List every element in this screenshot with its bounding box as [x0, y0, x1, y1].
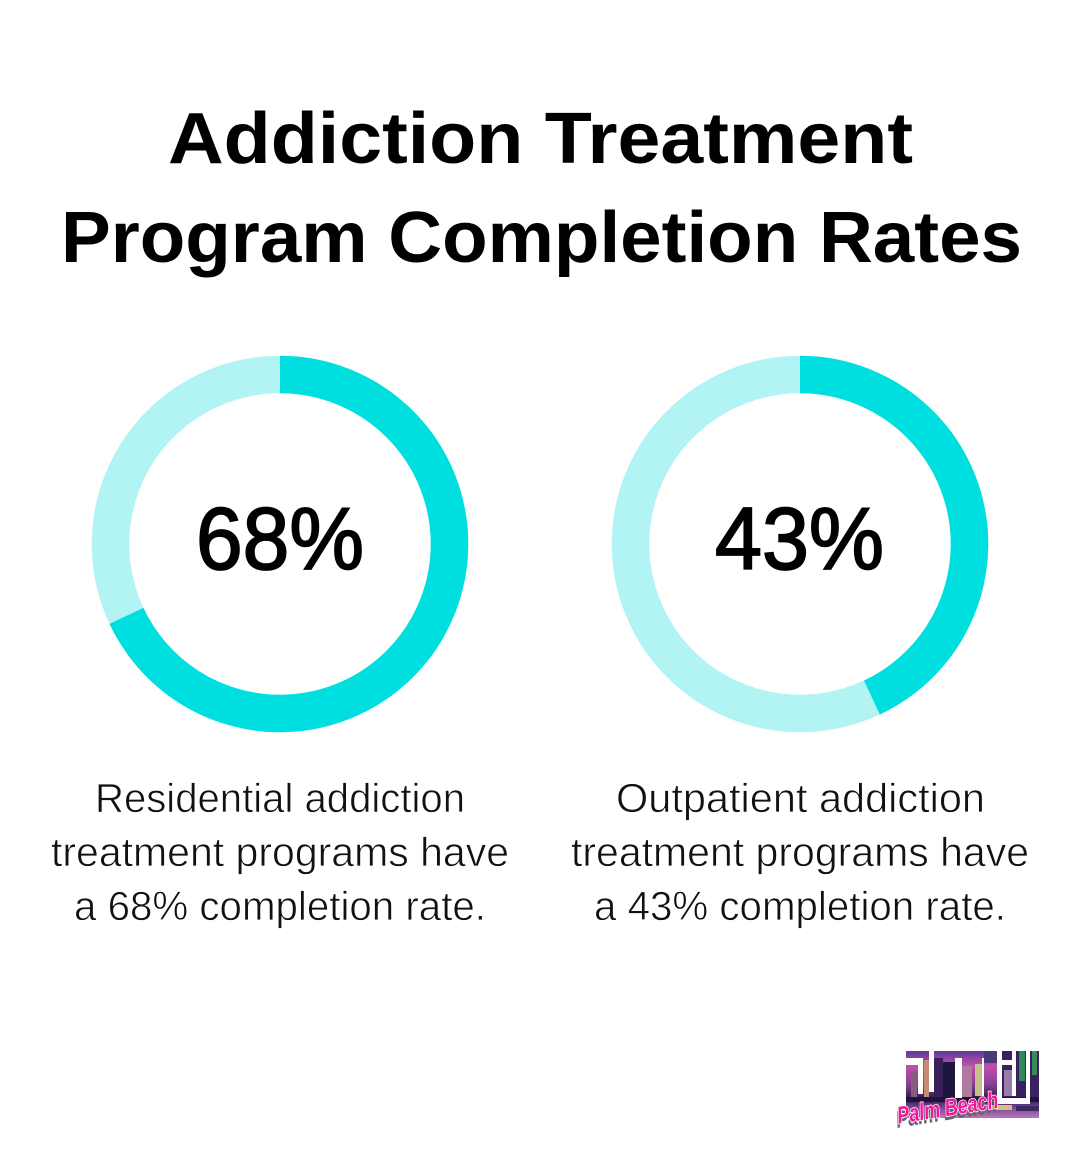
buildings — [911, 1072, 917, 1098]
description: residential: treatment programs have — [51, 829, 509, 875]
Palm Beach script: Palm Beach — [894, 1091, 999, 1134]
description: residential: a 68% completion rate. — [74, 883, 486, 929]
title: Addiction Treatment — [168, 99, 913, 179]
title: Program Completion Rates — [61, 198, 1022, 278]
description: outpatient: Outpatient addiction — [616, 775, 985, 821]
title — [61, 99, 1022, 278]
donut chart: 43% — [630, 374, 970, 714]
logo: Amity Palm Beach — [894, 1045, 1039, 1134]
description: residential — [51, 775, 509, 929]
description: outpatient: a 43% completion rate. — [594, 883, 1006, 929]
Palm Beach script: Palm Beach — [895, 1087, 1000, 1130]
value: 43%: 43% — [715, 489, 884, 588]
description: residential: Residential addiction — [95, 775, 465, 821]
amity lettering knocked out in white — [906, 1045, 1030, 1104]
value: 68%: 68% — [196, 489, 364, 588]
description: outpatient: treatment programs have — [571, 829, 1029, 875]
panel: residential programs — [51, 374, 509, 929]
description: outpatient — [571, 775, 1029, 929]
panel: outpatient programs — [571, 374, 1029, 929]
donut chart: 68% — [110, 374, 450, 714]
